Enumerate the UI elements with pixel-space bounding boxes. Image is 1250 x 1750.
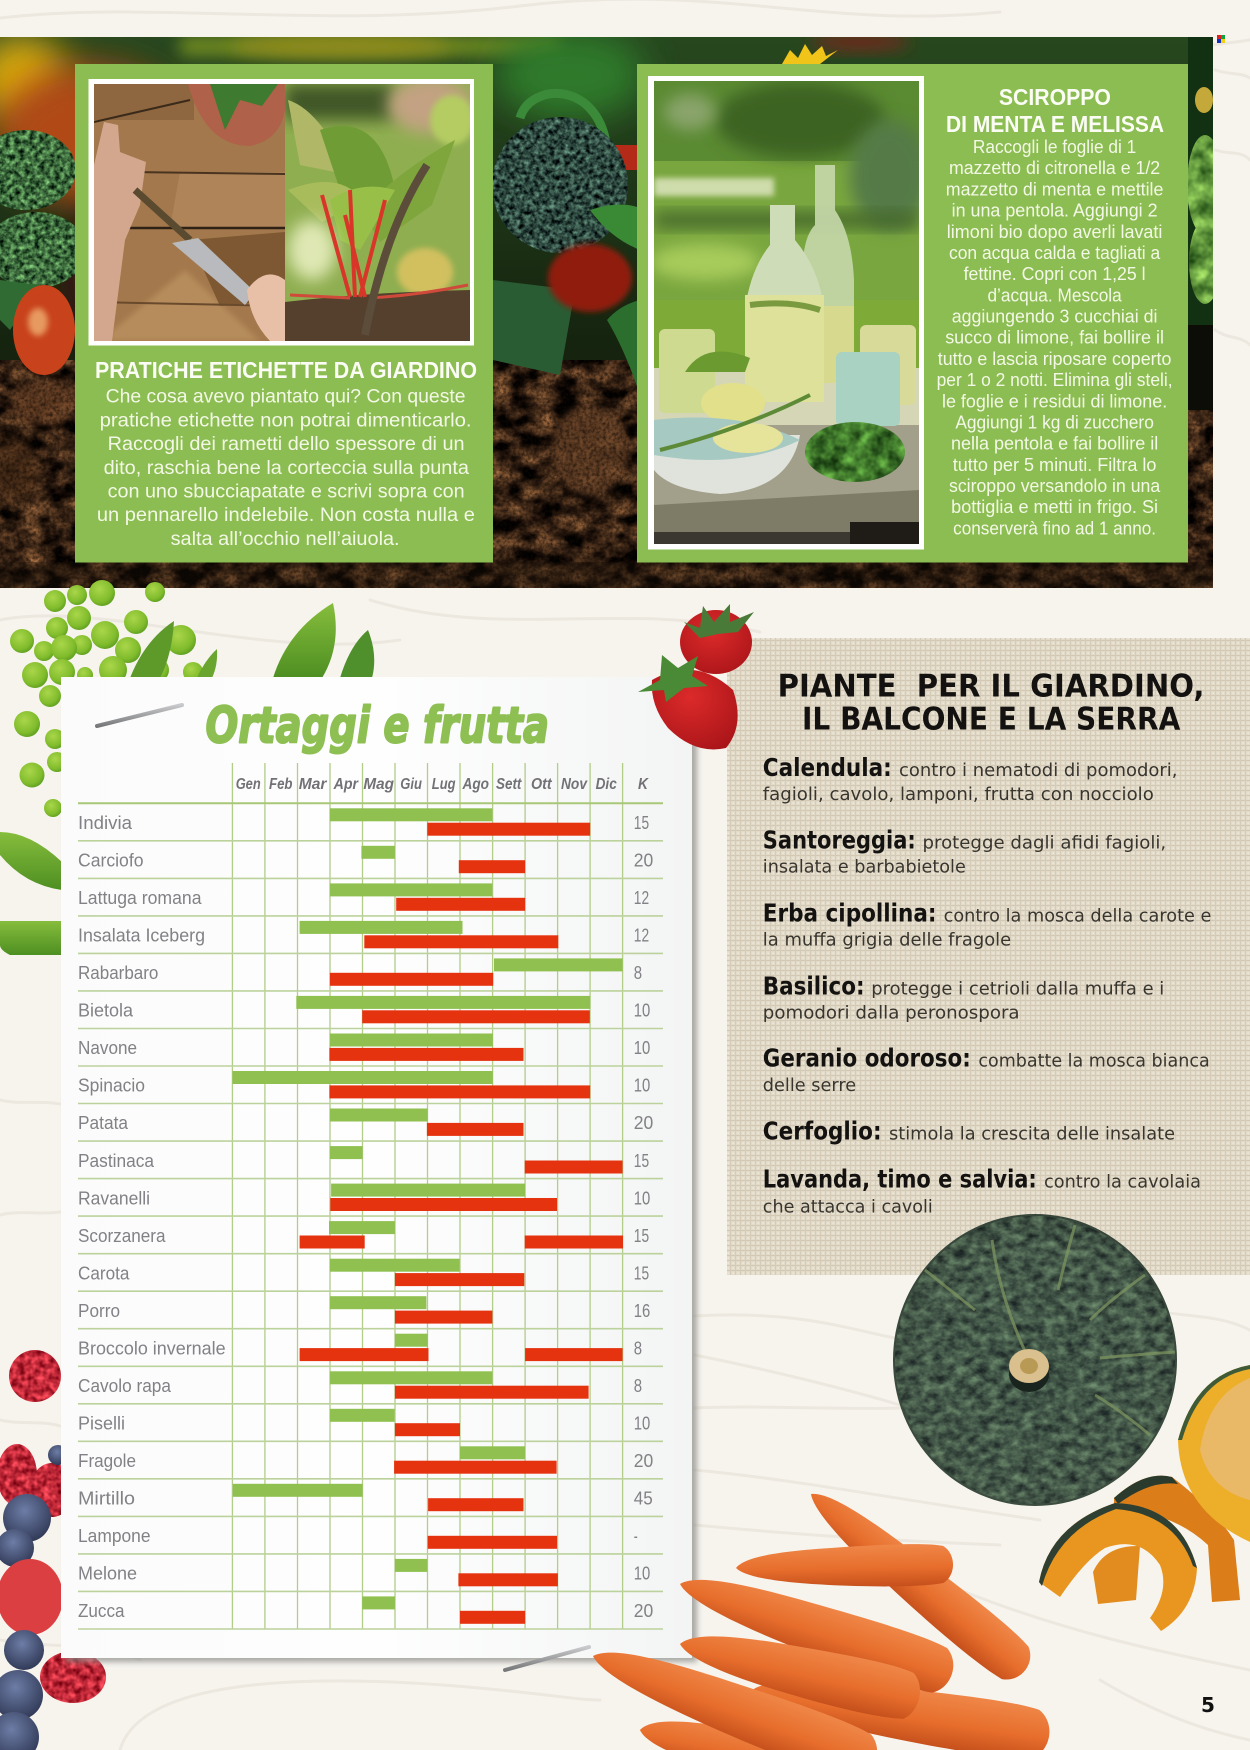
decoration: carrots [583, 1476, 1053, 1750]
row: Mirtillo [78, 1484, 653, 1511]
row: Melone: Melone [78, 1564, 137, 1584]
item: lavanda, timo e salvia: Lavanda, timo e salvia: [763, 1165, 1037, 1194]
glasses [659, 329, 715, 413]
row: Indivia [78, 808, 649, 836]
left broccoli and tomato [0, 130, 76, 210]
row: Bietola [78, 996, 650, 1023]
row: Mirtillo: Mirtillo [78, 1489, 135, 1509]
row: Mirtillo: 45 [634, 1489, 653, 1509]
row: Indivia: Indivia [78, 813, 133, 833]
body text: un pennarello indelebile. Non costa nulla e [97, 505, 475, 526]
body text [97, 387, 475, 550]
body text: pratiche etichette non potrai dimenticarlo. [100, 410, 472, 431]
body text: Aggiungi 1 kg di zucchero [955, 413, 1154, 433]
body text: in una pentola. Aggiungi 2 [952, 201, 1158, 221]
row: Lampone: - [634, 1526, 638, 1546]
row: Broccolo invernale [78, 1334, 642, 1361]
mint [805, 422, 905, 482]
row: Scorzanera [78, 1221, 649, 1248]
month headers: Sett [496, 776, 522, 793]
body text: fettine. Copri con 1,25 l [964, 264, 1146, 284]
terracotta pot [188, 84, 285, 146]
month headers: Gen [236, 776, 261, 793]
row: Spinacio [78, 1071, 650, 1098]
row: Carciofo [78, 846, 653, 873]
hand [94, 122, 146, 341]
item: calendula: fagioli, cavolo, lamponi, frutta con nocciolo [763, 784, 1154, 805]
month headers: Apr [333, 776, 359, 793]
row: Navone [78, 1034, 650, 1061]
row: Fragole: Fragole [78, 1451, 136, 1471]
row: Zucca [78, 1596, 653, 1624]
row: Patata: Patata [78, 1113, 129, 1133]
heading [946, 84, 1164, 137]
body text: le foglie e i residui di limone. [942, 392, 1167, 412]
row: Carota [78, 1259, 649, 1286]
glass bottles [804, 165, 854, 306]
item: erba cipollina: la muffa grigia delle fragole [763, 930, 1011, 950]
item: lavanda, timo e salvia [763, 1165, 1201, 1218]
row: Piselli [78, 1409, 650, 1436]
row: Cavolo rapa: 8 [634, 1376, 642, 1396]
body text [937, 137, 1173, 539]
body text: salta all’occhio nell’aiuola. [171, 529, 400, 550]
row: Insalata Iceberg: 12 [634, 926, 649, 946]
row: Zucca: 20 [634, 1601, 653, 1621]
month headers: Giu [400, 776, 422, 793]
title: Ortaggi e frutta [206, 697, 549, 755]
right-side lettuce strip [1188, 37, 1213, 327]
body text: succo di limone, fai bollire il [945, 328, 1164, 348]
item: geranio odoroso: combatte la mosca bianca [978, 1051, 1210, 1072]
heading: IL BALCONE E LA SERRA [802, 702, 1180, 738]
row: Insalata Iceberg [78, 921, 649, 948]
heading: SCIROPPO [999, 84, 1111, 110]
row: Broccolo invernale: 8 [634, 1338, 642, 1358]
row: Lattuga romana: 12 [634, 888, 649, 908]
item: erba cipollina: contro la mosca della carote e [944, 906, 1211, 926]
photo: scraping twig and plant label [88, 77, 474, 346]
month headers: Mar [299, 776, 327, 793]
item: basilico: Basilico: [763, 971, 865, 1000]
body text: dito, raschia bene la corteccia sulla punta [104, 458, 469, 479]
month headers: Ago [462, 776, 489, 793]
month headers: Mag [363, 776, 394, 793]
row: Scorzanera: 15 [634, 1226, 649, 1246]
panel: sciroppo di menta e melissa [637, 64, 1188, 562]
row: Pastinaca [78, 1146, 649, 1174]
bowl [654, 435, 800, 494]
row: Piselli: 10 [634, 1414, 650, 1434]
row: Navone: 10 [634, 1038, 650, 1058]
item: lavanda, timo e salvia: contro la cavolaia [1044, 1172, 1201, 1193]
yellow flower [782, 44, 838, 64]
body text: aggiungendo 3 cucchiai di [952, 307, 1157, 327]
body text: tutto e lascia riposare coperto [938, 349, 1171, 369]
second hand [247, 274, 285, 341]
item: calendula: Calendula: [763, 753, 892, 782]
soil [0, 360, 1213, 588]
body text: limoni bio dopo averli lavati [947, 222, 1162, 242]
month headers: Feb [269, 776, 293, 793]
item: lavanda, timo e salvia: che attacca i cavoli [763, 1196, 933, 1218]
body text: nella pentola e fai bollire il [951, 434, 1158, 454]
body text: tutto per 5 minuti. Filtra lo [953, 455, 1156, 475]
row: Indivia: 15 [634, 813, 649, 833]
body text: per 1 o 2 notti. Elimina gli steli, [937, 370, 1173, 390]
row: Carciofo: Carciofo [78, 850, 144, 870]
body text: mazzetto di menta e mettile [946, 180, 1163, 200]
panel: table of vegetables and fruit [61, 677, 697, 1670]
row: Carota: Carota [78, 1263, 130, 1283]
row: Melone [78, 1559, 650, 1586]
row: Lampone: Lampone [78, 1526, 150, 1546]
item: santoreggia: Santoreggia: [763, 826, 916, 854]
item: erba cipollina: Erba cipollina: [763, 898, 936, 928]
body text: con uno sbucciapatate e scrivi sopra con [108, 482, 465, 502]
row: Melone: 10 [634, 1564, 650, 1584]
body text: mazzetto di citronella e 1/2 [949, 158, 1160, 178]
row: Porro [78, 1296, 650, 1324]
body text: sciroppo versandolo in una [949, 476, 1161, 496]
row: Cavolo rapa: Cavolo rapa [78, 1376, 172, 1396]
row: Ravanelli: Ravanelli [78, 1188, 150, 1208]
peeler [135, 190, 190, 240]
panel: burlap background for companion plants [727, 638, 1250, 1275]
row: Pastinaca: 15 [634, 1151, 649, 1171]
row: Piselli: Piselli [78, 1414, 125, 1434]
row: Ravanelli: 10 [634, 1188, 650, 1208]
twig label [365, 165, 427, 335]
body text: Raccogli dei rametti dello spessore di un [108, 434, 465, 455]
item: santoreggia [763, 826, 1166, 878]
photo: bottles and glasses of syrup [648, 76, 930, 550]
body text: Che cosa avevo piantato qui? Con queste [106, 387, 466, 408]
lemon and leaf [701, 383, 765, 423]
row: Patata [78, 1108, 653, 1136]
item: geranio odoroso: Geranio odoroso: [763, 1044, 971, 1073]
row: Bietola: Bietola [78, 1001, 134, 1021]
item: calendula: contro i nematodi di pomodori, [899, 760, 1178, 781]
row: Patata: 20 [634, 1113, 653, 1133]
decoration: strawberries [638, 604, 754, 749]
item: cerfoglio: stimola la crescita delle insalate [889, 1124, 1175, 1144]
row: Pastinaca: Pastinaca [78, 1151, 155, 1171]
decoration: peas and pods [0, 580, 374, 955]
row: Insalata Iceberg: Insalata Iceberg [78, 926, 205, 946]
item: erba cipollina [763, 898, 1211, 950]
heading: PIANTE PER IL GIARDINO, [778, 668, 1204, 704]
row: Bietola: 10 [634, 1001, 650, 1021]
row: Carciofo: 20 [634, 850, 653, 870]
row: Carota: 15 [634, 1263, 649, 1283]
panel: pratiche etichette da giardino [75, 64, 493, 562]
month headers: Ott [531, 776, 552, 793]
row: Rabarbaro: 8 [634, 963, 642, 983]
heading: PRATICHE ETICHETTE DA GIARDINO [95, 357, 477, 383]
item: basilico: pomodori dalla peronospora [763, 1002, 1020, 1024]
item: santoreggia: insalata e barbabietole [763, 856, 966, 878]
row: Lattuga romana [78, 883, 649, 911]
item: geranio odoroso [763, 1044, 1210, 1096]
item: cerfoglio: Cerfoglio: [763, 1116, 882, 1146]
row: Zucca: Zucca [78, 1601, 125, 1621]
month headers: Lug [432, 776, 456, 793]
banner background photo: vegetables and soil [0, 30, 1223, 588]
pumpkin [893, 1214, 1177, 1506]
registration colour mark [1217, 35, 1225, 43]
body text: con acqua calda e tagliati a [949, 243, 1161, 263]
row: Spinacio: 10 [634, 1076, 650, 1096]
row: Porro: 16 [634, 1301, 650, 1321]
row: Lampone [78, 1526, 638, 1549]
row: Fragole: 20 [634, 1451, 653, 1471]
row: Cavolo rapa [78, 1371, 642, 1399]
panel: piante per il giardino text [763, 668, 1211, 1218]
body text: d’acqua. Mescola [987, 286, 1123, 306]
month headers [236, 776, 649, 793]
row: Lattuga romana: Lattuga romana [78, 888, 202, 908]
month headers: Dic [596, 776, 617, 793]
row: Broccolo invernale: Broccolo invernale [78, 1338, 226, 1358]
body text: bottiglia e metti in frigo. Si [951, 497, 1158, 517]
item: basilico: protegge i cetrioli dalla muffa e i [871, 978, 1164, 999]
row: Scorzanera: Scorzanera [78, 1226, 166, 1246]
month headers: Nov [561, 776, 588, 793]
item: cerfoglio [763, 1116, 1175, 1146]
pumpkin slices [1039, 1365, 1250, 1631]
row: Rabarbaro [78, 958, 642, 986]
centre pepper handle, broccoli and leaves [520, 93, 607, 150]
row: Navone: Navone [78, 1038, 137, 1058]
pin top [97, 705, 182, 726]
heading [778, 668, 1204, 738]
page number: 5 [1201, 1693, 1215, 1717]
body text: conserverà fino ad 1 anno. [953, 519, 1156, 539]
decoration: raspberries and blueberries [0, 1350, 106, 1750]
row: Porro: Porro [78, 1301, 120, 1321]
item: calendula [763, 753, 1178, 805]
item: geranio odoroso: delle serre [763, 1075, 856, 1096]
row: Fragole [78, 1446, 653, 1474]
item: santoreggia: protegge dagli afidi fagioli, [922, 832, 1166, 854]
item: basilico [763, 971, 1164, 1024]
row: Rabarbaro: Rabarbaro [78, 963, 158, 983]
heading: DI MENTA E MELISSA [946, 111, 1164, 137]
month headers: K [638, 776, 649, 793]
row: Spinacio: Spinacio [78, 1076, 145, 1096]
row: Ravanelli [78, 1184, 650, 1211]
body text: Raccogli le foglie di 1 [973, 137, 1136, 157]
pin bottom [505, 1647, 589, 1670]
